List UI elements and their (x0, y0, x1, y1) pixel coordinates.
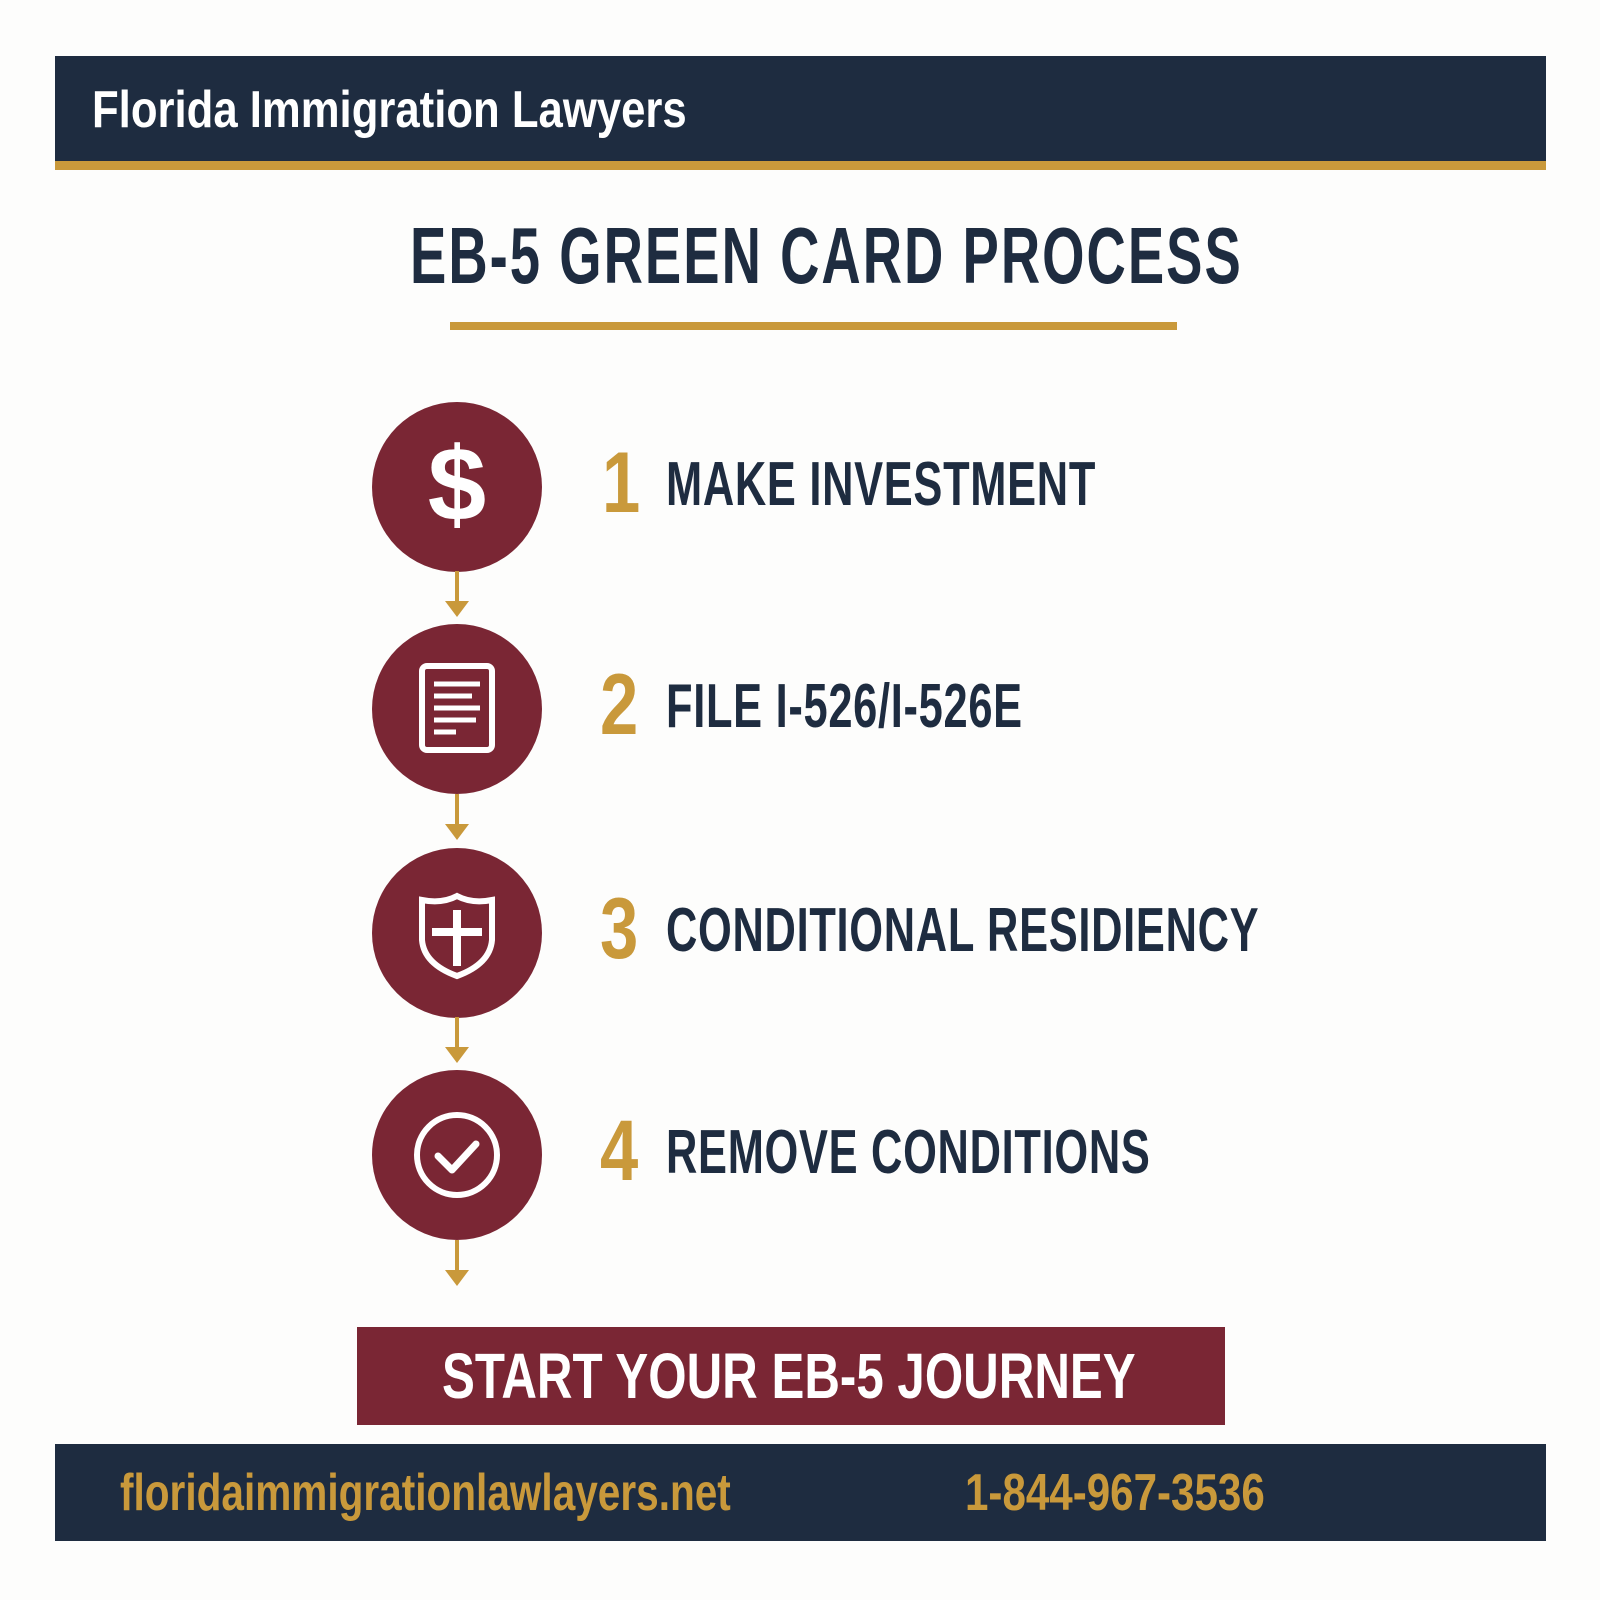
number 2: 2 (600, 657, 638, 753)
arrow 2 (445, 794, 469, 840)
step 3 (372, 848, 1259, 1018)
arrow 4 (445, 1240, 469, 1286)
number 3: 3 (600, 881, 638, 977)
label 1: MAKE INVESTMENT (666, 450, 1096, 519)
phone: 1-844-967-3536 (965, 1464, 1265, 1522)
label 2: FILE I-526/I-526E (666, 672, 1023, 741)
icon: check (372, 1070, 542, 1240)
footer bar (55, 1444, 1546, 1541)
arrow 3 (445, 1017, 469, 1063)
step 4 (372, 1070, 1151, 1240)
number 4: 4 (600, 1103, 638, 1199)
number 1: 1 (602, 435, 640, 531)
label 4: REMOVE CONDITIONS (666, 1118, 1151, 1187)
label 3: CONDITIONAL RESIDIENCY (666, 896, 1259, 965)
icon: dollar (372, 402, 542, 572)
icon: dollar: $ (428, 426, 486, 543)
icon: shield (372, 848, 542, 1018)
website: floridaimmigrationlawlayers.net (120, 1464, 731, 1522)
icon: document (372, 624, 542, 794)
title: EB-5 GREEN CARD PROCESS (410, 211, 1243, 300)
step 2 (372, 624, 1023, 794)
header bar (55, 56, 1546, 170)
CTA button (357, 1327, 1225, 1425)
arrow 1 (445, 571, 469, 617)
step 1 (372, 402, 1096, 572)
header text: Florida Immigration Lawyers (92, 81, 687, 139)
title underline (450, 322, 1177, 330)
CTA text: START YOUR EB-5 JOURNEY (442, 1340, 1136, 1412)
